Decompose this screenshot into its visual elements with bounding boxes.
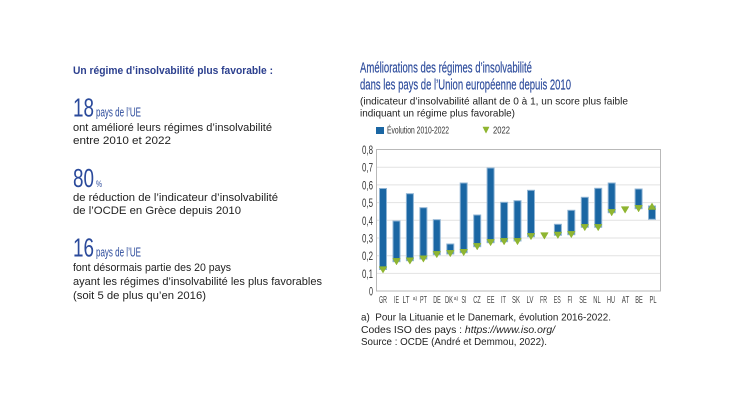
key figure: 16 countries: pays de l’UE bbox=[96, 246, 141, 260]
x axis labels: DE bbox=[433, 294, 441, 306]
key figure: 16 countries: 16 bbox=[73, 233, 94, 263]
legend: Évolution 2010-2022 bbox=[387, 124, 449, 137]
footnotes and source: Source : OCDE (André et Demmou, 2022). bbox=[361, 336, 547, 348]
x axis labels: NL bbox=[593, 294, 601, 306]
x axis labels: FR bbox=[540, 294, 547, 306]
key figure: 18 countries: entre 2010 et 2022 bbox=[73, 135, 171, 147]
chart subtitle: (indicateur d’insolvabilité allant de 0 à 1, un score plus faible bbox=[360, 95, 628, 107]
x axis labels: DK bbox=[445, 294, 453, 306]
x axis labels: SE bbox=[579, 294, 587, 306]
x axis labels: IE bbox=[394, 294, 399, 306]
x axis labels: GR bbox=[379, 294, 387, 306]
legend: 2022 bbox=[493, 125, 510, 137]
y axis labels: 0,8 bbox=[362, 145, 373, 157]
y axis labels: 0 bbox=[369, 286, 373, 298]
x axis labels: FI bbox=[568, 294, 572, 306]
y axis labels: 0,1 bbox=[362, 269, 373, 281]
bar chart bbox=[362, 145, 660, 306]
y axis labels: 0,3 bbox=[362, 234, 373, 246]
markers: 2022 values bbox=[379, 203, 656, 273]
chart subtitle: indiquant un régime plus favorable) bbox=[360, 108, 515, 120]
footnotes and source bbox=[361, 312, 611, 348]
key figure: 18 countries bbox=[73, 93, 272, 147]
key figure: 18 countries: pays de l’UE bbox=[96, 106, 141, 120]
x axis labels: a) bbox=[454, 296, 459, 302]
key figure: 16 countries: (soit 5 de plus qu’en 2016) bbox=[73, 290, 206, 302]
x axis labels: IT bbox=[501, 294, 506, 306]
chart title: dans les pays de l’Union européenne depuis 2010 bbox=[360, 77, 571, 93]
key figure: 80 percent: 80 bbox=[73, 163, 94, 193]
panel: chart bbox=[360, 61, 660, 348]
key figure: 18 countries: ont amélioré leurs régimes d’insolvabilité bbox=[73, 122, 272, 134]
x axis labels: CZ bbox=[473, 294, 481, 306]
key figure: 16 countries: ayant les régimes d’insolvabilité les plus favorables bbox=[73, 276, 322, 288]
y axis labels bbox=[362, 145, 373, 298]
key figure: 18 countries: 18 bbox=[73, 93, 94, 123]
chart title: Améliorations des régimes d’insolvabilité bbox=[360, 61, 532, 77]
legend bbox=[376, 124, 510, 137]
key figure: 16 countries: font désormais partie des 20 pays bbox=[73, 262, 231, 274]
heading: favourable regime: Un régime d’insolvabilité plus favorable : bbox=[73, 65, 273, 77]
key figure: 16 countries bbox=[73, 233, 322, 302]
x axis labels: ES bbox=[554, 294, 561, 306]
key figure: 80 percent: de réduction de l’indicateur d’insolvabilité bbox=[73, 192, 278, 204]
x axis labels: a) bbox=[413, 296, 418, 302]
key figure: 80 percent bbox=[73, 163, 278, 217]
x axis labels: PL bbox=[650, 294, 657, 306]
footnotes and source: Codes ISO des pays : https://www.iso.org/ bbox=[361, 324, 556, 336]
y axis labels: 0,2 bbox=[362, 251, 373, 263]
x axis labels: HU bbox=[607, 294, 615, 306]
x axis labels: BE bbox=[635, 294, 643, 306]
y axis labels: 0,5 bbox=[362, 198, 373, 210]
x axis labels: LV bbox=[526, 294, 534, 306]
bars: evolution 2010-2022 bbox=[380, 168, 656, 270]
x axis labels: PT bbox=[420, 294, 427, 306]
x axis labels: LT bbox=[402, 294, 410, 306]
chart title bbox=[360, 61, 571, 93]
x axis labels: EE bbox=[487, 294, 494, 306]
chart subtitle bbox=[360, 95, 628, 120]
footnotes and source: a) Pour la Lituanie et le Danemark, évolution 2016-2022. bbox=[361, 312, 611, 324]
y axis labels: 0,6 bbox=[362, 180, 373, 192]
y axis labels: 0,7 bbox=[362, 163, 373, 175]
key figure: 80 percent: % bbox=[96, 179, 102, 189]
x axis labels: AT bbox=[622, 294, 630, 306]
x axis labels: SI bbox=[462, 294, 466, 306]
key figure: 80 percent: de l’OCDE en Grèce depuis 2010 bbox=[73, 205, 241, 217]
x axis labels: SK bbox=[512, 294, 520, 306]
x axis labels bbox=[379, 294, 657, 306]
y axis labels: 0,4 bbox=[362, 216, 373, 228]
panel: key figures bbox=[73, 65, 322, 302]
